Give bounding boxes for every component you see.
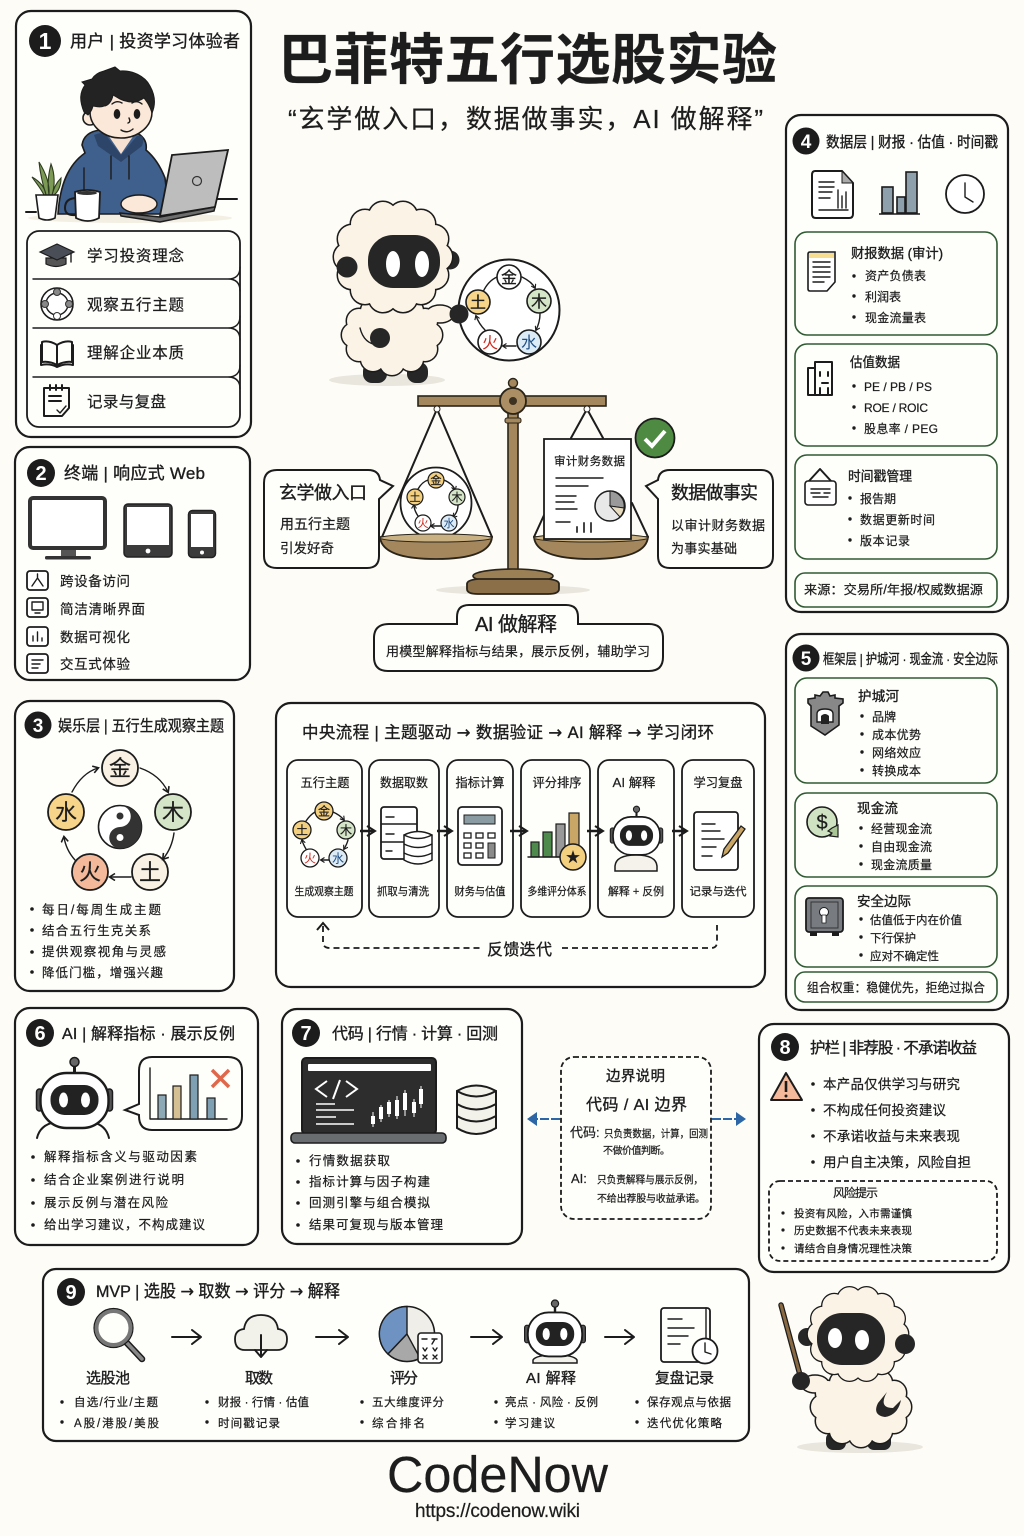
callout: boundary note: 不做价值判断。 <box>603 1144 670 1157</box>
callout: metaphysics as entry: 玄学做入口 <box>279 483 367 503</box>
callout: data as fact: 以审计财务数据 <box>671 518 765 533</box>
mini wheel <box>293 802 355 867</box>
icon: laptop with code <box>291 1058 446 1143</box>
left pan with wheel: 木 <box>452 491 462 504</box>
card: margin of safety: 下行保护 <box>870 931 916 945</box>
number badge 1: 1 <box>39 28 52 54</box>
step: review record: 保存观点与依据 <box>647 1395 732 1409</box>
number badge 3: 3 <box>33 716 43 737</box>
step: learning review: 记录与迭代 <box>690 885 746 898</box>
icon: open book <box>41 341 73 367</box>
number badge 4 <box>792 128 820 154</box>
url: https://codenow.wiki <box>415 1501 580 1522</box>
list: code bullets: 结果可复现与版本管理 <box>309 1217 443 1232</box>
box: risk warning: 请结合自身情况理性决策 <box>794 1242 912 1255</box>
arrow <box>316 1330 348 1344</box>
box: risk warning: 投资有风险，入市需谨慎 <box>794 1207 912 1220</box>
step: review record: 迭代优化策略 <box>647 1416 722 1430</box>
icon: warning triangle <box>771 1073 802 1100</box>
mini wheel: 木 <box>340 824 352 838</box>
icon: magnifier <box>94 1308 142 1359</box>
text: record: 记录与复盘 <box>87 392 166 411</box>
step: score: 评分 <box>390 1370 418 1387</box>
number badge 5 <box>792 644 820 672</box>
card: timestamp: 版本记录 <box>860 534 910 548</box>
heading 7: 代码 | 行情 · 计算 · 回测 <box>332 1024 498 1043</box>
list: guardrail bullets: 用户自主决策，风险自担 <box>823 1154 971 1170</box>
icon: safe <box>806 898 843 936</box>
flow arrows <box>360 830 686 832</box>
feature: visualization <box>27 627 130 646</box>
card: cash flow <box>795 793 997 877</box>
step: learning review <box>682 760 754 917</box>
step: five elements theme <box>287 760 362 917</box>
diagram: wheel held by sheep: 金 <box>501 269 517 287</box>
card: valuation data <box>795 344 997 446</box>
diagram: five elements cycle <box>48 750 191 890</box>
card: moat: 护城河 <box>858 689 900 704</box>
card: source <box>795 573 997 607</box>
number badge 9: 9 <box>65 1282 77 1304</box>
scale post and beam <box>418 378 606 594</box>
icon: document with clock <box>661 1308 718 1364</box>
left pan with wheel <box>380 468 492 559</box>
left pan with wheel: 水 <box>444 517 454 530</box>
hero: sheep mascot holding wheel <box>329 202 560 386</box>
card: margin of safety: 安全边际 <box>857 893 911 909</box>
list: entertainment bullets: 每日/每周生成主题 <box>42 902 161 917</box>
diagram: wheel held by sheep <box>458 260 560 360</box>
feature: interactive: 交互式体验 <box>60 656 130 672</box>
panel 2: terminal <box>15 447 250 680</box>
card: financial data: 资产负债表 <box>865 269 926 283</box>
icon: report doc <box>812 171 853 218</box>
callout: metaphysics as entry: 引发好奇 <box>280 540 334 556</box>
text: observe: 观察五行主题 <box>87 296 184 314</box>
left pan with wheel: 金 <box>430 473 442 487</box>
callout: data as fact <box>646 470 773 568</box>
number badge 3 <box>24 712 52 738</box>
card: valuation data: 估值数据 <box>850 355 900 370</box>
step: stock pool: A股/港股/美股 <box>74 1416 160 1430</box>
heading 8: 护栏 | 非荐股 · 不承诺收益 <box>810 1039 977 1057</box>
arrow <box>605 1330 634 1344</box>
feature: clean interface <box>27 598 145 617</box>
icon: robot <box>36 1058 112 1138</box>
card: financial data: 利润表 <box>865 290 901 304</box>
step: fetch: 财报 · 行情 · 估值 <box>218 1395 310 1409</box>
card: portfolio weight: 组合权重：稳健优先，拒绝过拟合 <box>807 980 985 995</box>
list: entertainment bullets <box>30 902 166 980</box>
list: entertainment bullets: 提供观察视角与灵感 <box>42 944 166 959</box>
callout: AI as explanation: 用模型解释指标与结果，展示反例，辅助学习 <box>386 644 650 659</box>
icon: monitor <box>30 498 105 560</box>
feature: clean interface: 简洁清晰界面 <box>60 601 145 617</box>
speech bubble with chart <box>125 1057 242 1130</box>
panel: central flow <box>276 703 765 987</box>
card: moat: 转换成本 <box>872 763 921 778</box>
mini wheel: 水 <box>332 852 344 866</box>
step: stock pool <box>60 1308 159 1430</box>
diagram: wheel held by sheep: 土 <box>470 294 486 312</box>
step: indicator calculation: 财务与估值 <box>454 884 506 898</box>
list: code bullets: 回测引擎与组合模拟 <box>309 1195 430 1210</box>
card: margin of safety: 估值低于内在价值 <box>870 913 962 927</box>
panel 6: AI <box>15 1008 258 1245</box>
step: AI explain: AI 解释 <box>526 1370 576 1387</box>
list: code bullets: 行情数据获取 <box>309 1153 390 1168</box>
diagram: five elements cycle: 土 <box>139 860 161 885</box>
step: stock pool: 选股池 <box>86 1370 130 1387</box>
title: 巴菲特五行选股实验 <box>278 29 777 91</box>
card: moat: 网络效应 <box>872 745 921 760</box>
feature: cross device: 跨设备访问 <box>60 573 130 589</box>
list: guardrail bullets <box>811 1077 971 1170</box>
list: AI bullets <box>31 1149 205 1232</box>
step: five elements theme: 生成观察主题 <box>294 884 354 898</box>
number badge 6: 6 <box>34 1023 46 1045</box>
icon: dollar circle <box>807 807 838 837</box>
card: cash flow: 现金流 <box>857 801 898 816</box>
callout: boundary note: 代码: <box>570 1125 600 1140</box>
callout: AI as explanation: AI 做解释 <box>475 613 557 636</box>
list: guardrail bullets: 本产品仅供学习与研究 <box>823 1077 960 1092</box>
step: AI explain <box>494 1300 598 1430</box>
number badge 9 <box>57 1278 85 1306</box>
step: fetch <box>205 1315 310 1430</box>
icon: robot <box>525 1300 585 1363</box>
icon: five elements ring <box>41 288 73 320</box>
heading 4: 数据层 | 财报 · 估值 · 时间戳 <box>826 134 998 151</box>
card: source: 来源：交易所/年报/权威数据源 <box>804 582 984 597</box>
diagram: five elements cycle: 木 <box>162 800 184 825</box>
heading 3: 娱乐层 | 五行生成观察主题 <box>58 717 224 735</box>
right pan with audited document: 审计财务数据 <box>554 454 626 468</box>
number badge 8 <box>771 1033 799 1061</box>
icon: calculator <box>458 807 502 865</box>
box: risk warning <box>769 1181 997 1261</box>
icon: castle shield <box>808 692 843 735</box>
illustration: person with laptop <box>26 67 237 223</box>
icon: bar chart <box>879 172 920 214</box>
mini wheel: 金 <box>318 804 330 818</box>
step: scoring: 多维评分体系 <box>528 884 586 898</box>
callout: boundary note: AI: <box>571 1171 587 1186</box>
list: code bullets <box>296 1153 443 1232</box>
right strings <box>534 409 648 537</box>
list: goals <box>27 231 240 427</box>
mini wheel: 火 <box>304 852 316 866</box>
feedback loop: 反馈迭代 <box>487 941 552 959</box>
card: timestamp: 报告期 <box>860 491 896 506</box>
step: AI explain: 亮点 · 风险 · 反例 <box>505 1395 598 1409</box>
icon: document with pencil <box>694 812 745 870</box>
callout: boundary note: 边界说明 <box>606 1068 665 1085</box>
callout: boundary note: 代码 / AI 边界 <box>586 1096 687 1114</box>
card: financial data <box>795 232 997 335</box>
heading: central flow: 中央流程 | 主题驱动 → 数据验证 → AI 解释 → 学习闭环 <box>302 723 714 742</box>
subtitle: “玄学做入口，数据做事实，AI 做解释” <box>288 104 763 134</box>
step: data fetch: 抓取与清洗 <box>377 884 429 898</box>
callout: metaphysics as entry: 用五行主题 <box>280 516 350 532</box>
card: timestamp: 时间戳管理 <box>848 469 912 484</box>
number badge 6 <box>26 1019 54 1047</box>
icon: tablet <box>124 504 172 557</box>
diagram: five elements cycle: 火 <box>79 860 101 885</box>
list: AI bullets: 给出学习建议，不构成建议 <box>44 1217 205 1232</box>
card: margin of safety <box>795 886 997 967</box>
left pan with wheel: 土 <box>410 491 420 504</box>
number badge 2: 2 <box>35 463 47 485</box>
icon: robot <box>610 806 663 871</box>
step: stock pool: 自选/行业/主题 <box>74 1396 158 1409</box>
icon: score bars with star: ★ <box>566 849 580 865</box>
list: AI bullets: 结合企业案例进行说明 <box>44 1172 184 1187</box>
icon: yin yang <box>98 806 142 848</box>
diagram: five elements cycle: 水 <box>55 800 77 825</box>
list: AI bullets: 解释指标含义与驱动因素 <box>44 1149 197 1164</box>
box: risk warning: 风险提示 <box>833 1185 878 1200</box>
arrow: left blue <box>527 1112 560 1126</box>
left pan with wheel: 火 <box>418 518 428 530</box>
heading 1: 用户 | 投资学习体验者 <box>70 32 240 51</box>
left strings <box>382 409 492 537</box>
card: moat: 品牌 <box>872 710 896 724</box>
icon: dollar circle: $ <box>816 812 828 834</box>
step: AI explain: AI 解释 <box>612 776 656 790</box>
panel 9: MVP <box>43 1269 749 1441</box>
step: AI explain: 学习建议 <box>505 1416 556 1430</box>
callout: AI as explanation <box>374 605 663 671</box>
heading 6: AI | 解释指标 · 展示反例 <box>62 1025 235 1043</box>
card: cash flow: 现金流质量 <box>871 857 932 872</box>
card: moat <box>795 678 997 783</box>
callout: data as fact: 数据做事实 <box>671 483 758 503</box>
mini wheel: 土 <box>296 824 308 838</box>
panel 7: code <box>282 1009 522 1244</box>
card: valuation data: 股息率 / PEG <box>864 421 938 436</box>
callout: boundary note: 只负责解释与展示反例， <box>597 1173 703 1186</box>
step: scoring: 评分排序 <box>532 775 582 790</box>
callout: boundary note <box>561 1057 711 1219</box>
panel 3: entertainment layer <box>15 701 234 991</box>
arrow <box>471 1330 502 1344</box>
card: valuation data: PE / PB / PS <box>864 380 932 394</box>
step: scoring <box>521 760 590 917</box>
step: five elements theme: 五行主题 <box>300 776 350 790</box>
list: guardrail bullets: 不构成任何投资建议 <box>823 1103 946 1118</box>
list: entertainment bullets: 降低门槛，增强兴趣 <box>42 965 163 980</box>
number badge 7: 7 <box>300 1023 312 1045</box>
icon: database <box>457 1086 496 1134</box>
card: timestamp <box>795 455 997 559</box>
step: AI explain: 解释 + 反例 <box>608 884 664 898</box>
icon: pie with scorecard <box>379 1306 442 1363</box>
card: portfolio weight <box>795 972 997 1002</box>
step: review record: 复盘记录 <box>655 1369 714 1387</box>
diagram: wheel held by sheep: 水 <box>521 334 537 352</box>
icon: clock <box>946 175 984 213</box>
diagram: wheel held by sheep: 火 <box>482 335 498 352</box>
list: AI bullets: 展示反例与潜在风险 <box>44 1195 168 1210</box>
icon: server and database <box>381 807 432 864</box>
step: indicator calculation <box>447 760 513 917</box>
step: data fetch <box>369 760 439 917</box>
mascot: sheep with pointer <box>781 1287 923 1453</box>
callout: boundary note: 只负责数据，计算，回测 <box>604 1127 708 1140</box>
panel 5: framework layer <box>786 634 1008 1010</box>
step: review record <box>635 1308 732 1430</box>
card: financial data: 财报数据 (审计) <box>851 246 943 261</box>
card: margin of safety: 应对不确定性 <box>870 949 939 963</box>
panel 1: user <box>16 11 251 437</box>
heading 9: MVP | 选股 → 取数 → 评分 → 解释 <box>96 1282 340 1302</box>
icon: green check <box>636 418 674 458</box>
box: risk warning: 历史数据不代表未来表现 <box>794 1224 912 1237</box>
right pan with audited document <box>534 439 648 559</box>
number badge 5: 5 <box>801 649 812 670</box>
number badge 8: 8 <box>779 1037 791 1059</box>
panel 8: guardrails <box>759 1024 1009 1272</box>
icon: notepad <box>44 385 69 416</box>
card: timestamp: 数据更新时间 <box>860 512 935 527</box>
text: understand: 理解企业本质 <box>87 344 184 362</box>
step: indicator calculation: 指标计算 <box>456 775 504 790</box>
step: learning review: 学习复盘 <box>694 775 742 790</box>
card: financial data: 现金流量表 <box>865 310 926 325</box>
card: cash flow: 自由现金流 <box>871 839 932 854</box>
step: score: 综合排名 <box>372 1416 425 1430</box>
feature: cross device <box>27 571 130 590</box>
hero: balance scale <box>380 378 674 595</box>
feature: visualization: 数据可视化 <box>60 630 130 645</box>
text: learn: 学习投资理念 <box>87 246 184 265</box>
card: moat: 成本优势 <box>872 728 921 742</box>
panel 4: data layer <box>786 115 1008 612</box>
diagram: wheel held by sheep: 木 <box>531 293 547 311</box>
callout: boundary note: 不给出荐股与收益承诺。 <box>597 1192 705 1205</box>
callout: metaphysics as entry <box>264 470 393 568</box>
number badge 2 <box>27 459 55 487</box>
heading 2: 终端 | 响应式 Web <box>64 464 205 483</box>
feedback loop <box>317 923 717 959</box>
card: cash flow: 经营现金流 <box>871 821 932 836</box>
step: score: 五大维度评分 <box>372 1395 444 1409</box>
list: code bullets: 指标计算与因子构建 <box>309 1174 430 1189</box>
number badge 7 <box>292 1019 320 1047</box>
number badge 4: 4 <box>801 132 812 153</box>
icon: score bars with star <box>528 813 586 870</box>
list: entertainment bullets: 结合五行生克关系 <box>42 923 151 938</box>
icon: graduation cap <box>40 244 74 266</box>
list: guardrail bullets: 不承诺收益与未来表现 <box>823 1129 960 1144</box>
card: valuation data: ROE / ROIC <box>864 401 928 415</box>
diagram: five elements cycle: 金 <box>109 756 131 781</box>
step: fetch: 取数 <box>245 1370 273 1387</box>
logo: CodeNow: CodeNow <box>387 1446 608 1503</box>
step: AI explain <box>598 760 674 917</box>
feature: interactive <box>27 654 130 673</box>
icon: cloud download <box>235 1315 287 1357</box>
step: score <box>360 1306 444 1430</box>
callout: data as fact: 为事实基础 <box>671 541 737 556</box>
step: data fetch: 数据取数 <box>380 775 428 790</box>
icon: phone <box>188 510 216 558</box>
arrow <box>172 1330 201 1344</box>
step: fetch: 时间戳记录 <box>218 1417 280 1430</box>
number badge 1 <box>29 25 61 57</box>
arrow: right blue <box>712 1112 746 1126</box>
